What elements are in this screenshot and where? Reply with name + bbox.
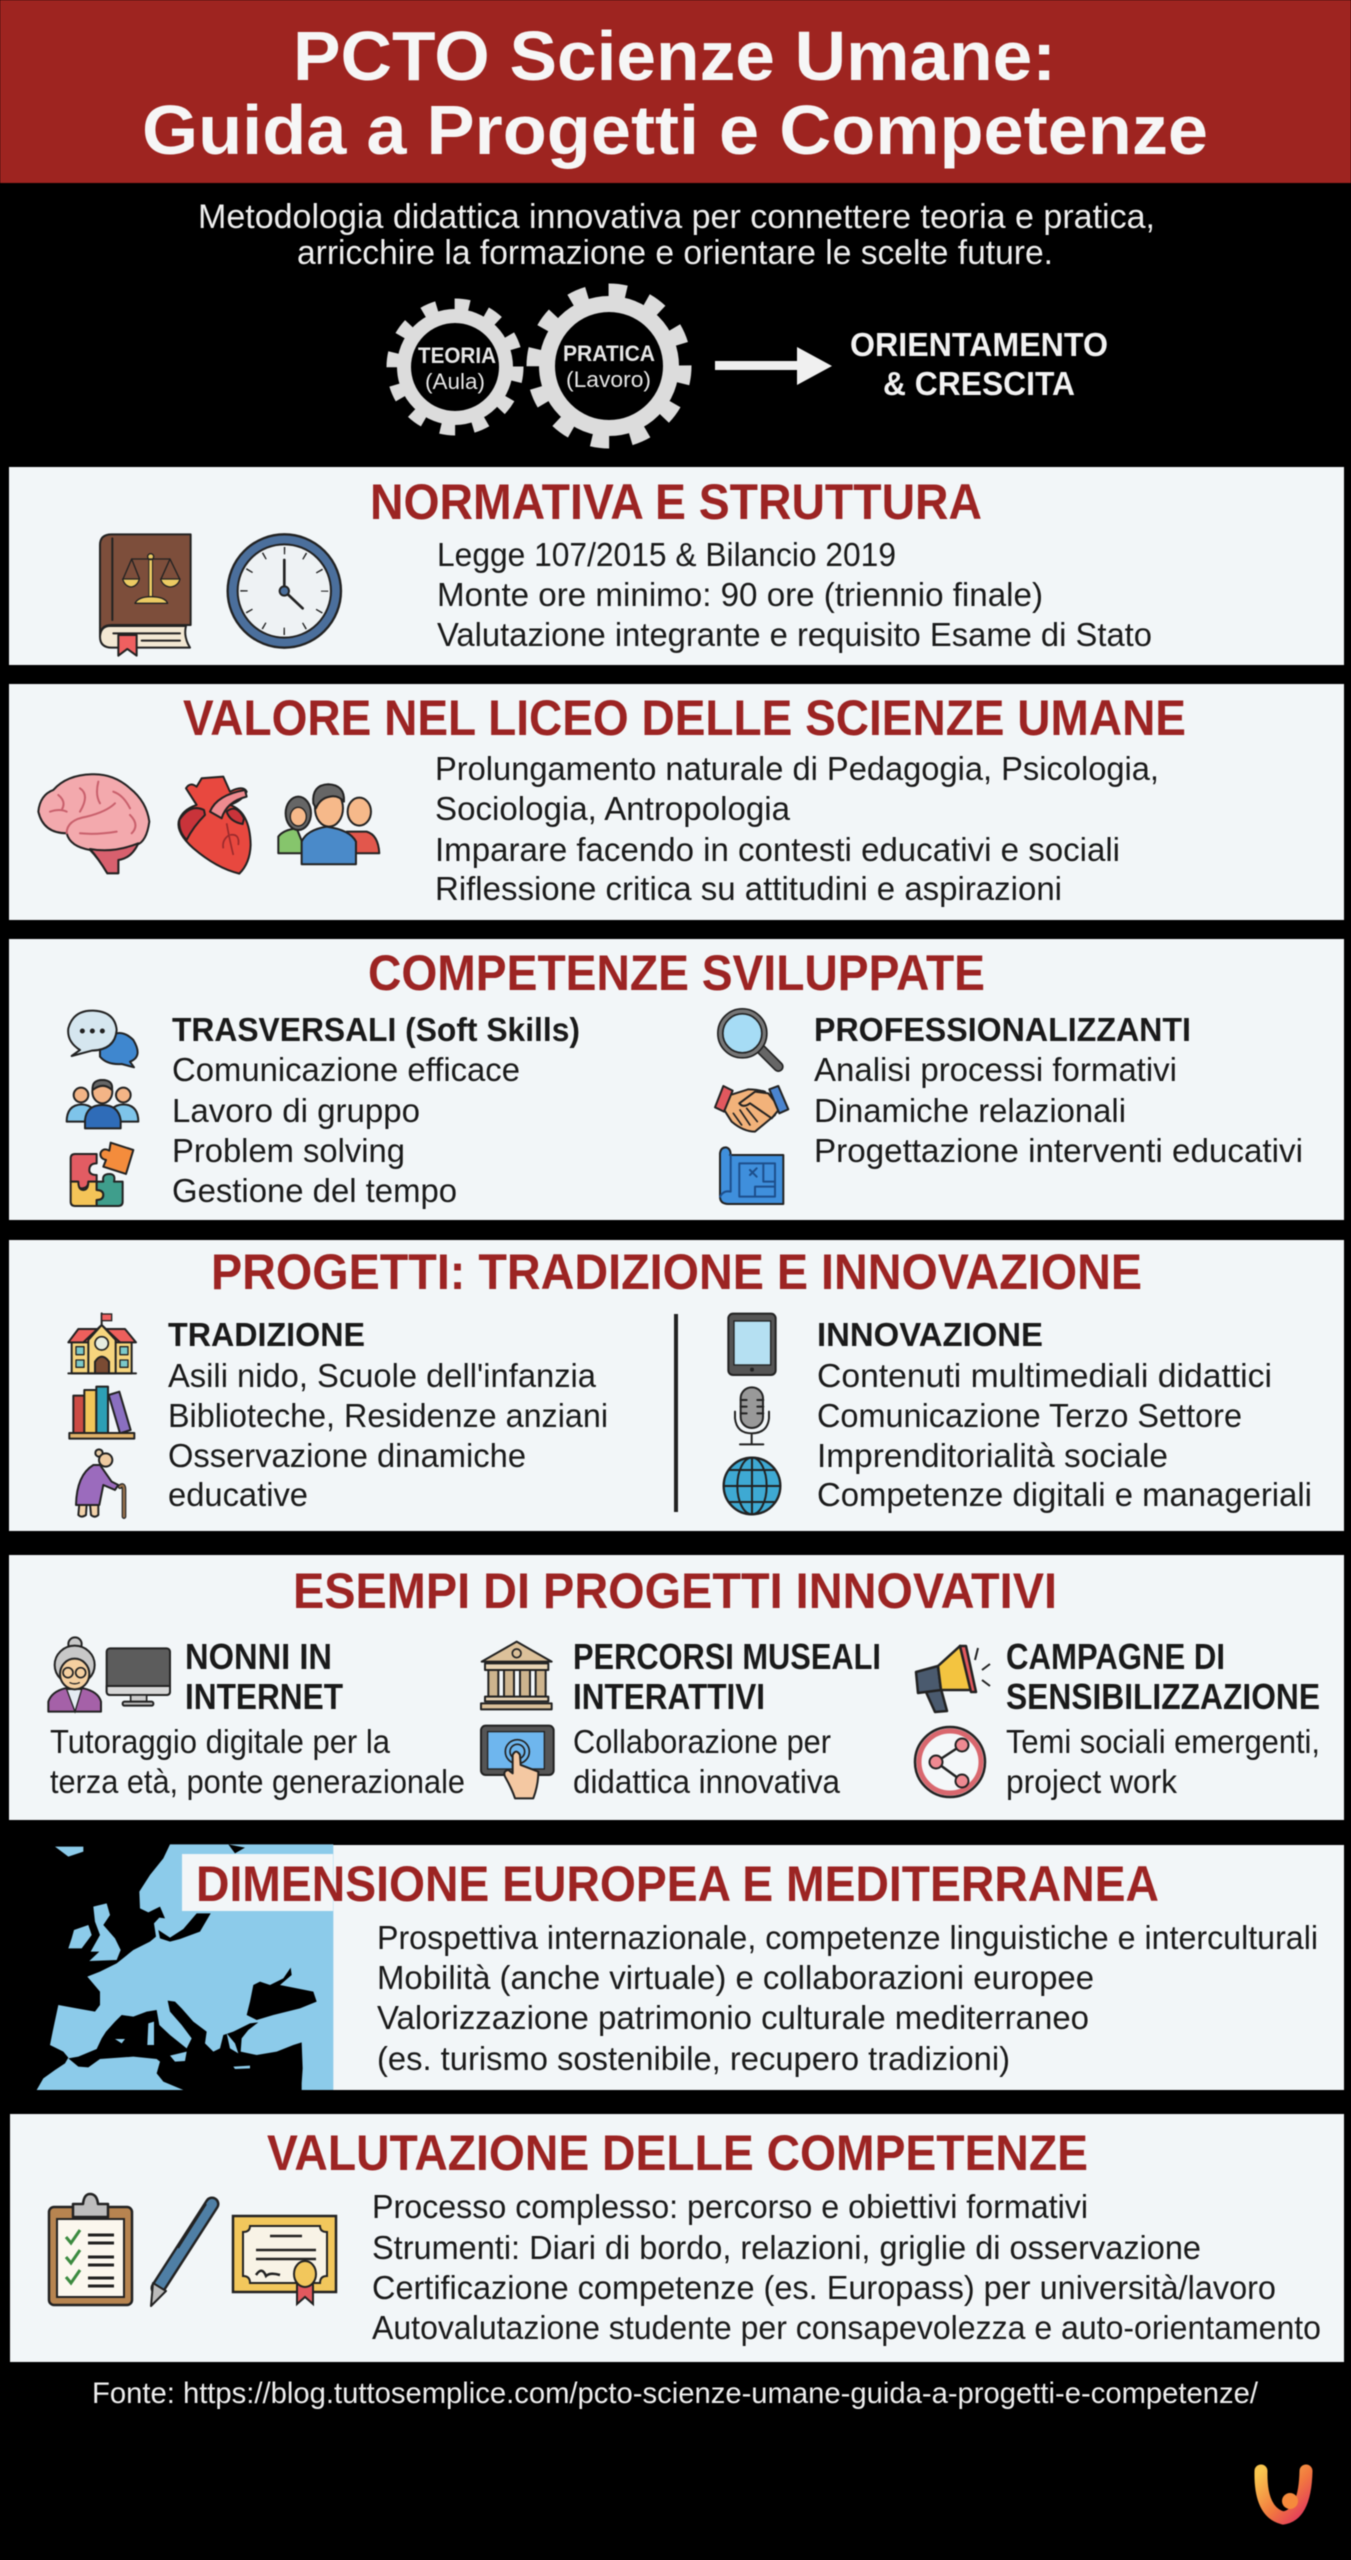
- icon: blueprint: [720, 1147, 783, 1204]
- icon: share: [915, 1727, 985, 1797]
- text block: professionalizzanti: Analisi processi formativi: [814, 1051, 1177, 1088]
- logo: [1261, 2471, 1306, 2518]
- text block: (es. turismo sostenibile, recupero tradizioni): [377, 2040, 1010, 2077]
- text block: Prolungamento naturale di Pedagogia, Psicologia,: [435, 750, 1159, 787]
- panel: progetti tradizione e innovazione: [9, 1240, 1344, 1531]
- header banner: [0, 0, 1351, 183]
- orientamento label: ORIENTAMENTO: [850, 326, 1108, 363]
- icon: elder with cane: [76, 1449, 124, 1517]
- icon: globe: [724, 1458, 780, 1514]
- panel: esempi di progetti innovativi: [9, 1555, 1344, 1820]
- gear: teoria: TEORIA: [418, 343, 496, 368]
- icon: clock: [228, 534, 341, 648]
- text block: nonni in internet: terza età, ponte generazionale: [50, 1763, 465, 1800]
- heading: VALORE NEL LICEO DELLE SCIENZE UMANE: [183, 690, 1186, 746]
- text block: Sociologia, Antropologia: [435, 790, 791, 827]
- divider: [674, 1314, 678, 1512]
- icon: pen: [151, 2204, 212, 2306]
- text block: nonni in internet: Tutoraggio digitale per la: [50, 1723, 391, 1760]
- icon: school: [68, 1313, 136, 1373]
- text block: trasversali: Gestione del tempo: [172, 1172, 457, 1209]
- icon: touch tablet: [481, 1726, 554, 1798]
- text block: [372, 2188, 1321, 2346]
- text block: professionalizzanti: PROFESSIONALIZZANTI: [814, 1011, 1191, 1048]
- icon: magnifier: [720, 1011, 778, 1067]
- text block: trasversali: Lavoro di gruppo: [172, 1092, 420, 1129]
- subtitle: [198, 198, 1155, 272]
- panel: valore nel liceo: [9, 684, 1344, 920]
- map of europe: [37, 1844, 333, 2090]
- text block: percorsi museali: didattica innovativa: [573, 1763, 841, 1800]
- text block: Valorizzazione patrimonio culturale mediterraneo: [377, 1999, 1089, 2036]
- icon: people: [278, 784, 379, 864]
- text block: trasversali: Problem solving: [172, 1132, 405, 1169]
- text block: [437, 536, 1152, 653]
- orientamento label: & CRESCITA: [883, 365, 1075, 402]
- icon: microphone: [735, 1387, 769, 1444]
- icon: chat bubbles: [68, 1011, 138, 1067]
- icon: law book: [100, 534, 191, 656]
- text block: campagne: CAMPAGNE DI: [1006, 1636, 1225, 1677]
- text block: Legge 107/2015 & Bilancio 2019: [437, 536, 896, 573]
- title: PCTO Scienze Umane:: [293, 17, 1056, 95]
- heading: VALUTAZIONE DELLE COMPETENZE: [267, 2125, 1088, 2181]
- text block: tradizione: Asili nido, Scuole dell'infanzia: [168, 1357, 597, 1394]
- text block: tradizione: Osservazione dinamiche: [168, 1437, 526, 1474]
- title: [142, 17, 1208, 169]
- subtitle: Metodologia didattica innovativa per connettere teoria e pratica,: [198, 198, 1155, 236]
- text block: campagne: [1006, 1636, 1320, 1800]
- icon: team: [67, 1080, 138, 1128]
- icon: monitor: [107, 1648, 170, 1706]
- text block: percorsi museali: PERCORSI MUSEALI: [573, 1636, 881, 1677]
- text block: innovazione: [817, 1316, 1312, 1513]
- text block: nonni in internet: [50, 1636, 465, 1800]
- text block: innovazione: Imprenditorialità sociale: [817, 1437, 1168, 1474]
- panel: dimensione europea e mediterranea: [37, 1844, 1344, 2090]
- orientamento label: [850, 326, 1108, 402]
- panel: competenze sviluppate: [9, 939, 1344, 1220]
- text block: trasversali: TRASVERSALI (Soft Skills): [172, 1011, 580, 1048]
- heading: NORMATIVA E STRUTTURA: [370, 474, 982, 530]
- icon: certificate: [233, 2216, 336, 2304]
- gear: teoria: [392, 304, 518, 430]
- source line: Fonte: https://blog.tuttosemplice.com/pcto-scienze-umane-guida-a-progetti-e-competenze/: [92, 2377, 1259, 2410]
- text block: Valutazione integrante e requisito Esame di Stato: [437, 616, 1152, 653]
- text block: Strumenti: Diari di bordo, relazioni, griglie di osservazione: [372, 2229, 1201, 2266]
- text block: Certificazione competenze (es. Europass) per università/lavoro: [372, 2269, 1276, 2306]
- text block: professionalizzanti: Dinamiche relazionali: [814, 1092, 1126, 1129]
- icon: museum: [481, 1642, 552, 1709]
- gear: pratica: PRATICA: [563, 341, 655, 366]
- text block: innovazione: Contenuti multimediali didattici: [817, 1357, 1272, 1394]
- text block: professionalizzanti: Progettazione interventi educativi: [814, 1132, 1303, 1169]
- heading: COMPETENZE SVILUPPATE: [368, 945, 985, 1001]
- icon: handshake: [715, 1086, 788, 1132]
- text block: tradizione: Biblioteche, Residenze anziani: [168, 1397, 608, 1434]
- text block: innovazione: INNOVAZIONE: [817, 1316, 1043, 1353]
- text block: [435, 750, 1159, 907]
- icon: heart: [178, 777, 251, 874]
- gear: pratica: (Lavoro): [566, 367, 651, 392]
- text block: Monte ore minimo: 90 ore (triennio finale): [437, 576, 1043, 613]
- text block: Processo complesso: percorso e obiettivi formativi: [372, 2188, 1088, 2225]
- icon: grandmother: [48, 1637, 101, 1712]
- text block: innovazione: Comunicazione Terzo Settore: [817, 1397, 1242, 1434]
- arrow: [715, 347, 832, 385]
- gears diagram: [392, 290, 1108, 442]
- text block: professionalizzanti: [814, 1011, 1303, 1169]
- text block: percorsi museali: INTERATTIVI: [573, 1676, 765, 1717]
- text block: trasversali: Comunicazione efficace: [172, 1051, 520, 1088]
- heading: ESEMPI DI PROGETTI INNOVATIVI: [293, 1563, 1057, 1619]
- text block: Riflessione critica su attitudini e aspirazioni: [435, 870, 1062, 907]
- text block: campagne: Temi sociali emergenti,: [1006, 1723, 1320, 1760]
- text block: Autovalutazione studente per consapevolezza e auto-orientamento: [372, 2309, 1321, 2346]
- text block: Imparare facendo in contesti educativi e sociali: [435, 831, 1120, 868]
- title: Guida a Progetti e Competenze: [142, 91, 1208, 169]
- text block: tradizione: educative: [168, 1476, 308, 1513]
- text block: Prospettiva internazionale, competenze linguistiche e interculturali: [377, 1919, 1318, 1956]
- text block: percorsi museali: Collaborazione per: [573, 1723, 831, 1760]
- gear: pratica: [533, 290, 685, 442]
- icon: books: [69, 1387, 134, 1439]
- panel: normativa e struttura: [9, 467, 1344, 665]
- text block: percorsi museali: [573, 1636, 881, 1800]
- gear: teoria: (Aula): [425, 369, 485, 394]
- text block: tradizione: TRADIZIONE: [168, 1316, 365, 1353]
- subtitle: arricchire la formazione e orientare le scelte future.: [297, 234, 1053, 272]
- icon: puzzle: [71, 1143, 133, 1206]
- icon: megaphone: [916, 1646, 990, 1712]
- text block: Mobilità (anche virtuale) e collaborazioni europee: [377, 1959, 1094, 1996]
- heading box: [182, 1854, 333, 1911]
- heading: DIMENSIONE EUROPEA E MEDITERRANEA: [196, 1856, 1159, 1912]
- text block: nonni in internet: INTERNET: [185, 1676, 343, 1717]
- panel: valutazione delle competenze: [10, 2114, 1344, 2362]
- icon: clipboard: [49, 2194, 132, 2305]
- icon: brain: [38, 774, 149, 873]
- icon: tablet: [728, 1314, 776, 1375]
- text block: tradizione: [168, 1316, 608, 1513]
- text block: trasversali: [172, 1011, 580, 1209]
- text block: campagne: project work: [1006, 1763, 1177, 1800]
- heading: PROGETTI: TRADIZIONE E INNOVAZIONE: [211, 1244, 1142, 1300]
- text block: [377, 1919, 1318, 2077]
- text block: innovazione: Competenze digitali e manageriali: [817, 1476, 1312, 1513]
- text block: nonni in internet: NONNI IN: [185, 1636, 332, 1677]
